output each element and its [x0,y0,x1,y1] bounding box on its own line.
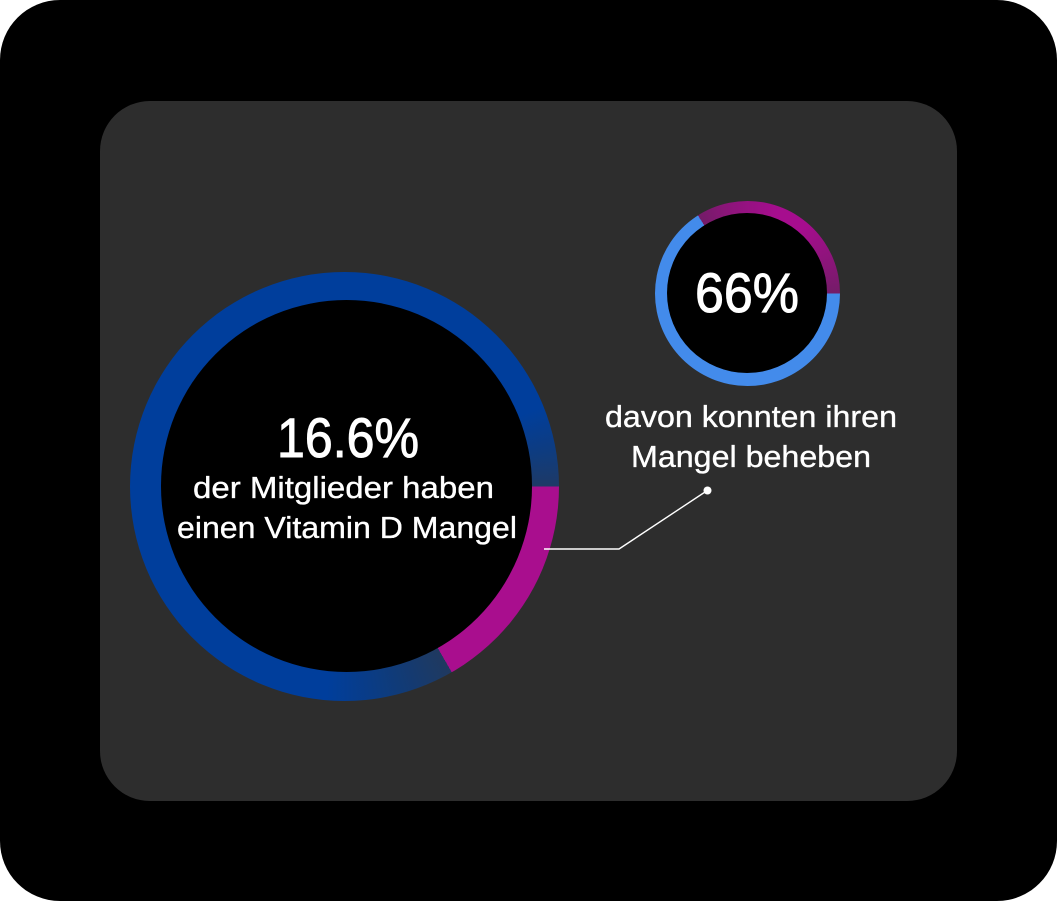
chart: large donut ring 16.6% [130,272,559,701]
large donut centre [160,300,532,672]
small donut label line 1: davon konnten ihren [605,399,897,434]
panel: dark content panel [100,101,957,800]
chart: small donut ring 66% [654,200,840,386]
large donut label line 2: einen Vitamin D Mangel [177,510,517,545]
small donut centre [667,213,827,373]
big number: 16.6%: 16.6% [277,406,419,469]
small donut label line 2: Mangel beheben [631,439,871,474]
connector line with dot [544,486,712,549]
large donut label line 1: der Mitglieder haben [193,470,494,505]
big number: 66%: 66% [695,261,799,324]
